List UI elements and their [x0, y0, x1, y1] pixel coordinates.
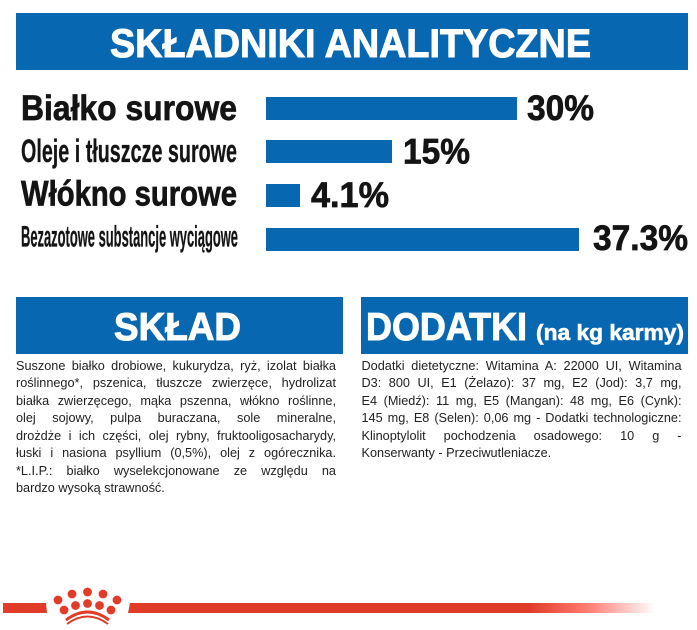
text block: skład [16, 358, 336, 495]
icon: royal crown logo [54, 588, 121, 624]
heading: DODATKI: DODATKI [366, 306, 527, 349]
text block: skład: Suszone białko drobiowe, kukurydza, ryż, izolat białka [16, 358, 336, 372]
row: Włókno surowe 4.1%: Włókno surowe [21, 174, 237, 214]
text block: dodatki: D3: 800 UI, E1 (Żelazo): 37 mg, E2 (Jod): 3,7 mg, [362, 376, 682, 390]
text block: dodatki: Konserwanty - Przeciwutleniacze. [362, 446, 551, 460]
row: Włókno surowe 4.1% [21, 174, 389, 215]
row: Białko surowe 30%: Białko surowe [21, 89, 237, 128]
text block: skład: roślinnego*, pszenica, tłuszcze zwierzęce, hydrolizat [16, 376, 336, 390]
title banner [16, 13, 688, 70]
text block: dodatki [362, 358, 682, 460]
row: Włókno surowe 4.1%: 4.1% [311, 176, 389, 215]
heading: DODATKI [361, 297, 688, 354]
text block: dodatki: E4 (Miedź): 11 mg, E5 (Mangan): 48 mg, E6 (Cynk): [362, 394, 682, 408]
footer stripe left [3, 603, 47, 613]
text block: skład: olej sojowy, pulpa buraczana, sole mineralne, [16, 411, 336, 425]
text block: skład: *L.I.P.: białko wyselekcjonowane ze względu na [16, 464, 336, 478]
row: Bezazotowe substancje wyciągowe 37.3%: Bezazotowe substancje wyciągowe [21, 220, 238, 254]
heading: SKŁAD: SKŁAD [114, 306, 241, 349]
text block: skład: białka zwierzęcego, mąka pszenna, włókno roślinne, [16, 394, 336, 408]
row: Bezazotowe substancje wyciągowe 37.3%: 37.3% [593, 219, 688, 258]
text block: dodatki: Dodatki dietetyczne: Witamina A: 22000 UI, Witamina [362, 358, 682, 372]
heading: DODATKI: (na kg karmy) [536, 320, 684, 345]
heading: SKŁAD [16, 297, 343, 354]
text block: skład: drożdże i ich części, olej rybny, fruktooligosacharydy, [16, 428, 336, 442]
row: Białko surowe 30% [21, 89, 594, 128]
text block: dodatki: Klinoptylolit pochodzenia osadowego: 10 g - [362, 428, 682, 442]
row: Oleje i tłuszcze surowe 15%: Oleje i tłuszcze surowe [21, 133, 237, 169]
row: Oleje i tłuszcze surowe 15%: 15% [403, 132, 470, 172]
text block: dodatki: 145 mg, E8 (Selen): 0,06 mg - Dodatki technologiczne: [362, 411, 682, 425]
text block: skład: bardzo wysoką strawność. [16, 481, 165, 495]
row: Białko surowe 30%: 30% [527, 89, 594, 128]
title banner: SKŁADNIKI ANALITYCZNE [110, 22, 591, 66]
row: Bezazotowe substancje wyciągowe 37.3% [21, 219, 688, 258]
text block: skład: łuski i nasiona psyllium (0,5%), olej z ogórecznika. [16, 446, 336, 460]
footer stripe right fading [128, 603, 655, 613]
